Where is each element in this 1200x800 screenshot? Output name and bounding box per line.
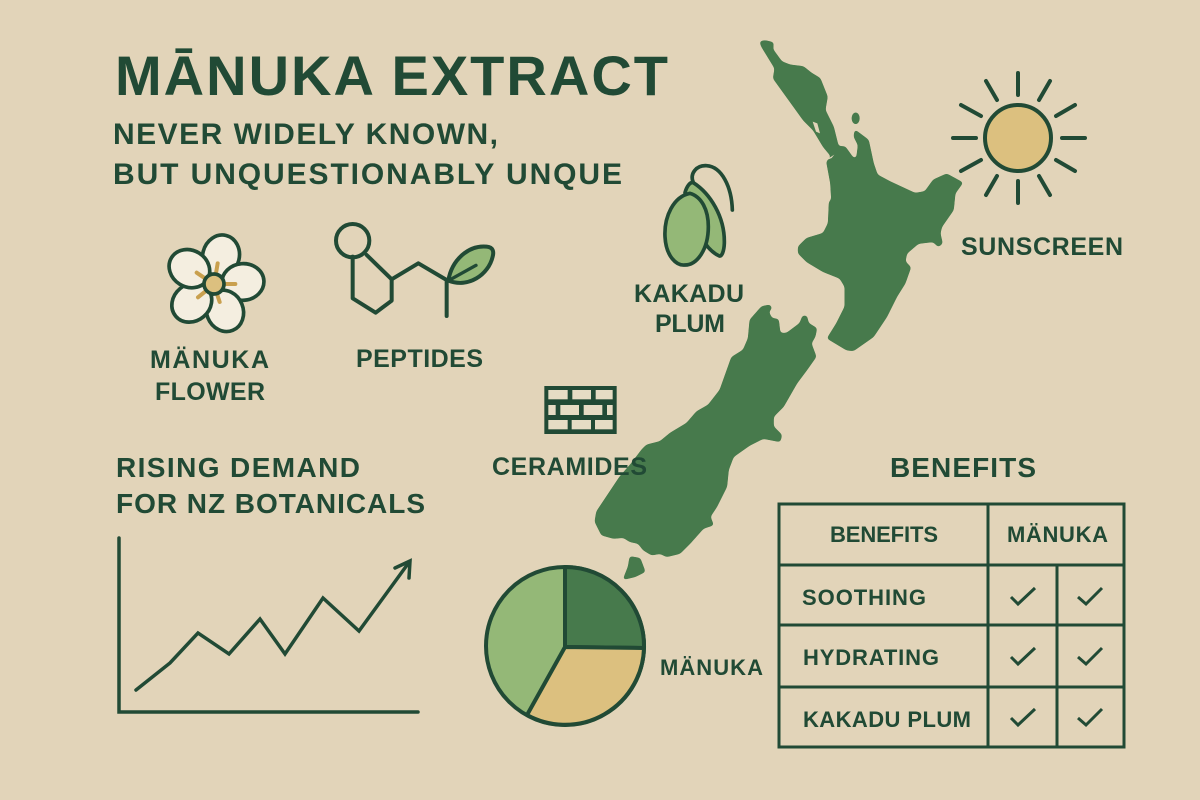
icon: ceramides brick wall: [544, 386, 617, 434]
table header: MÄNUKA: [1007, 522, 1108, 547]
row: kakadu plum: KAKADU PLUM: [803, 707, 971, 732]
heading: rising demand: FOR NZ BOTANICALS: [116, 488, 425, 519]
table: benefits: [779, 504, 1124, 747]
row: kakadu plum: [803, 707, 1102, 732]
icon: sun: [953, 73, 1085, 203]
map: South Island: [595, 305, 817, 579]
chart axes: [119, 538, 418, 712]
table header: BENEFITS: [830, 522, 938, 547]
subtitle: [113, 118, 622, 191]
icon: kakadu plum: [665, 166, 732, 265]
title: MĀNUKA EXTRACT: [115, 44, 668, 107]
row: hydrating: HYDRATING: [803, 645, 939, 670]
line chart: rising demand: [119, 538, 418, 712]
map: North Island: [760, 41, 963, 351]
map: New Zealand: [595, 41, 963, 579]
icon: manuka flower: [162, 231, 265, 337]
label: ceramides: CERAMIDES: [492, 453, 647, 481]
heading: rising demand: [116, 452, 425, 519]
label: peptides: PEPTIDES: [356, 345, 483, 373]
label: pie chart manuka: MÄNUKA: [660, 655, 763, 680]
label: manuka flower: FLOWER: [155, 378, 265, 406]
trend line with arrow: [136, 561, 410, 690]
label: sunscreen: SUNSCREEN: [961, 233, 1123, 261]
row: soothing: SOOTHING: [802, 585, 926, 610]
label: kakadu plum: PLUM: [655, 310, 725, 338]
label: kakadu plum: KAKADU: [634, 280, 744, 308]
table header: [830, 522, 1108, 547]
label: manuka flower: MÄNUKA: [150, 346, 269, 374]
subtitle: NEVER WIDELY KNOWN,: [113, 118, 498, 151]
subtitle: BUT UNQUESTIONABLY UNQUE: [113, 158, 622, 191]
row: soothing: [802, 585, 1102, 610]
pie chart: [486, 567, 644, 725]
row: hydrating: [803, 645, 1102, 670]
heading: rising demand: RISING DEMAND: [116, 452, 360, 483]
heading: benefits: BENEFITS: [890, 452, 1036, 483]
label: manuka flower: [150, 346, 269, 406]
table grid: [779, 504, 1124, 747]
icon: peptides molecule with leaf: [336, 224, 493, 316]
label: kakadu plum: [634, 280, 744, 338]
